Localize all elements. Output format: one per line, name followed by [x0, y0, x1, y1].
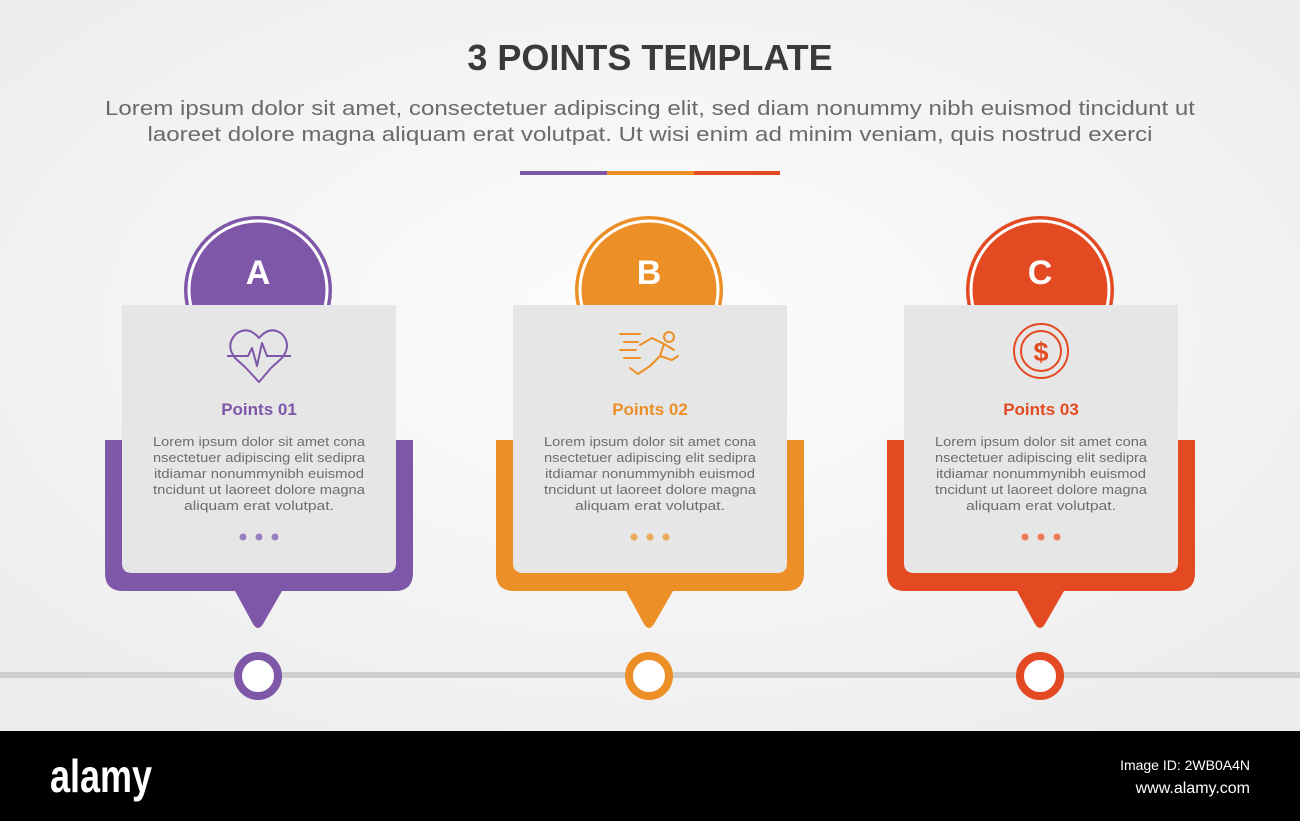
footer bar: www.alamy.com — [1135, 780, 1250, 797]
body text: nsectetuer adipiscing elit sedipra — [153, 451, 365, 465]
body text: Lorem ipsum dolor sit amet cona — [935, 435, 1147, 449]
body text: aliquam erat volutpat. — [966, 499, 1116, 513]
body text: tncidunt ut laoreet dolore magna — [544, 483, 756, 497]
subtitle text — [105, 97, 1195, 146]
footer bar — [0, 731, 1300, 821]
subtitle text: laoreet dolore magna aliquam erat volutpat. Ut wisi enim ad minim veniam, quis nostrud exerci — [148, 123, 1152, 146]
timeline marker — [238, 656, 278, 696]
body text — [153, 435, 365, 513]
body text: tncidunt ut laoreet dolore magna — [153, 483, 365, 497]
body text: aliquam erat volutpat. — [184, 499, 334, 513]
footer image id: Image ID: 2WB0A4N — [1120, 757, 1250, 773]
panel: point A — [105, 216, 413, 696]
letter B: B — [637, 254, 661, 292]
letter C: C — [1028, 254, 1052, 292]
letter A: A — [246, 254, 270, 292]
subtitle text: Lorem ipsum dolor sit amet, consectetuer adipiscing elit, sed diam nonummy nibh euismod tincidunt ut — [105, 97, 1195, 120]
panel: point B — [496, 216, 804, 696]
timeline marker — [1020, 656, 1060, 696]
body text: Lorem ipsum dolor sit amet cona — [544, 435, 756, 449]
title: 3 POINTS TEMPLATE — [467, 37, 833, 78]
timeline marker — [629, 656, 669, 696]
heading: Points 01 — [221, 400, 297, 419]
body text — [544, 435, 756, 513]
body text: itdiamar nonummynibh euismod — [936, 467, 1146, 481]
body text: nsectetuer adipiscing elit sedipra — [544, 451, 756, 465]
timeline line — [0, 672, 1300, 678]
icon: dollar coin: $ — [1033, 337, 1049, 367]
body text: itdiamar nonummynibh euismod — [154, 467, 364, 481]
icon: dollar coin — [1014, 324, 1068, 378]
footer logo: alamy — [50, 750, 152, 802]
body text: nsectetuer adipiscing elit sedipra — [935, 451, 1147, 465]
icon: runner — [620, 332, 678, 374]
panel: point C — [887, 216, 1195, 696]
body text — [935, 435, 1147, 513]
body text: aliquam erat volutpat. — [575, 499, 725, 513]
color divider bar — [520, 171, 780, 175]
heading: Points 03 — [1003, 400, 1079, 419]
body text: itdiamar nonummynibh euismod — [545, 467, 755, 481]
heading: Points 02 — [612, 400, 688, 419]
icon: heart pulse — [227, 330, 291, 382]
body text: Lorem ipsum dolor sit amet cona — [153, 435, 365, 449]
body text: tncidunt ut laoreet dolore magna — [935, 483, 1147, 497]
